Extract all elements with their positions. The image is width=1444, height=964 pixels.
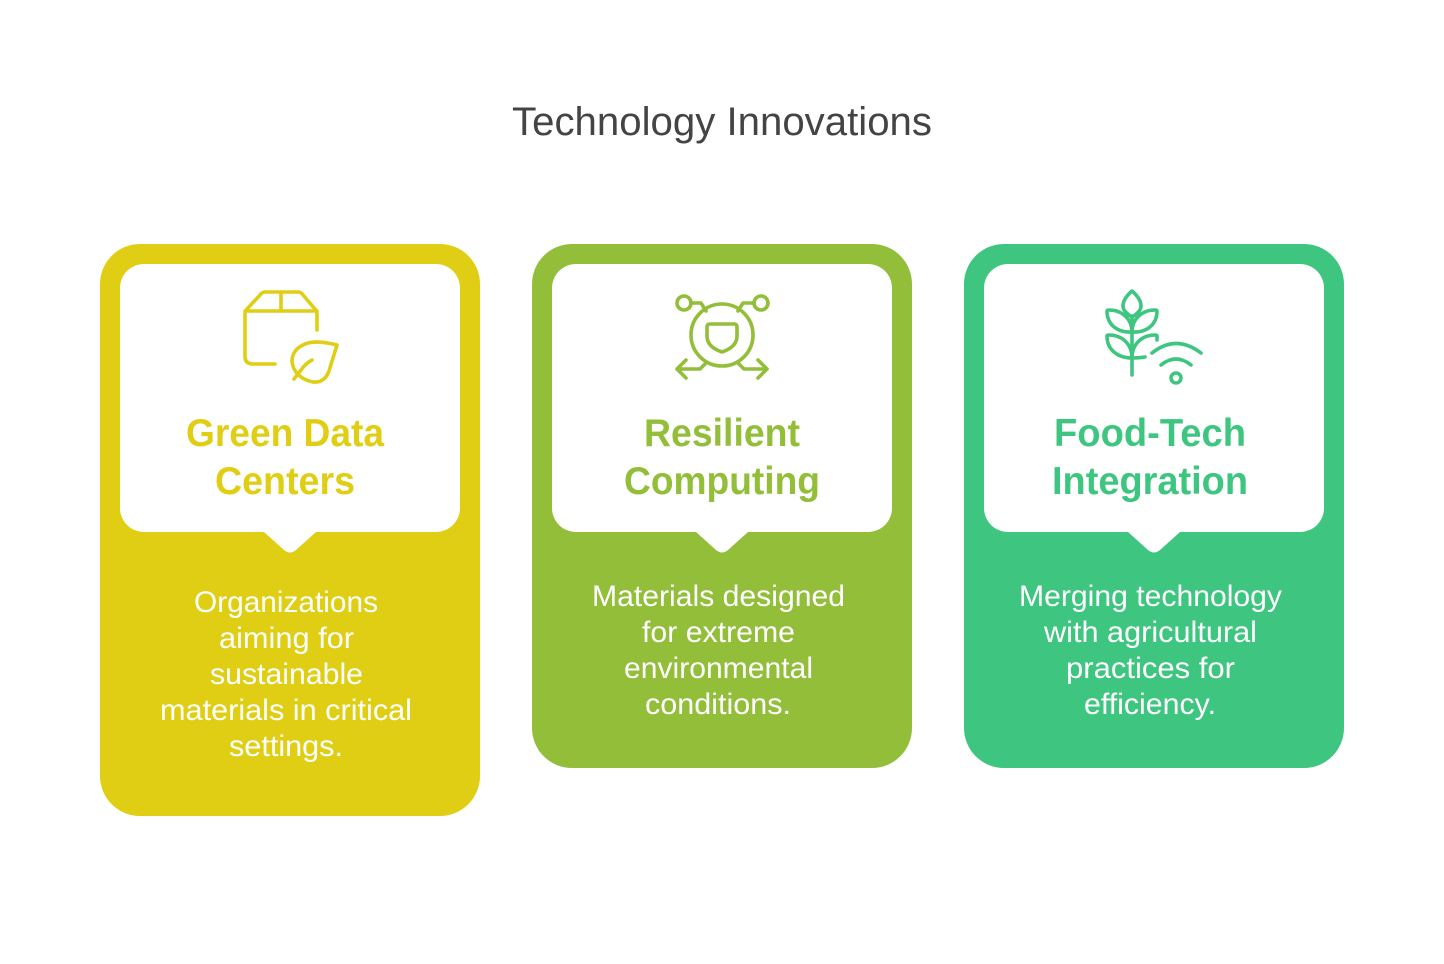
panel: Resilient Computing: [532, 244, 912, 768]
card background: [532, 244, 912, 768]
panel: Food-Tech Integration: [964, 244, 1344, 768]
heading: Food-Tech: [1054, 412, 1246, 455]
description: aiming for: [219, 622, 354, 655]
white header box: [984, 264, 1324, 552]
title: Technology Innovations: [512, 100, 932, 144]
heading: [1052, 412, 1248, 503]
icon: box with leaf: [245, 292, 337, 382]
description: settings.: [229, 730, 343, 763]
white header box: [120, 264, 460, 552]
heading: [624, 412, 820, 503]
description: efficiency.: [1084, 688, 1216, 721]
heading: Integration: [1052, 460, 1248, 503]
description: sustainable: [210, 658, 363, 691]
heading: [186, 412, 384, 503]
heading: Resilient: [644, 412, 800, 455]
description: [160, 586, 412, 763]
panel: Green Data Centers: [100, 244, 480, 816]
icon: shield in circle with arrows: [677, 296, 768, 378]
description: [1019, 580, 1282, 721]
description: practices for: [1066, 652, 1235, 685]
description: Organizations: [194, 586, 378, 619]
description: Materials designed: [592, 580, 845, 613]
card background: [100, 244, 480, 816]
description: [592, 580, 845, 721]
description: environmental: [624, 652, 813, 685]
card background: [964, 244, 1344, 768]
white header box: [552, 264, 892, 552]
heading: Green Data: [186, 412, 384, 455]
description: with agricultural: [1043, 616, 1257, 649]
description: conditions.: [645, 688, 791, 721]
description: materials in critical: [160, 694, 412, 727]
heading: Centers: [215, 460, 355, 503]
heading: Computing: [624, 460, 820, 503]
icon: wheat with wifi: [1107, 291, 1201, 383]
description: for extreme: [642, 616, 795, 649]
description: Merging technology: [1019, 580, 1282, 613]
